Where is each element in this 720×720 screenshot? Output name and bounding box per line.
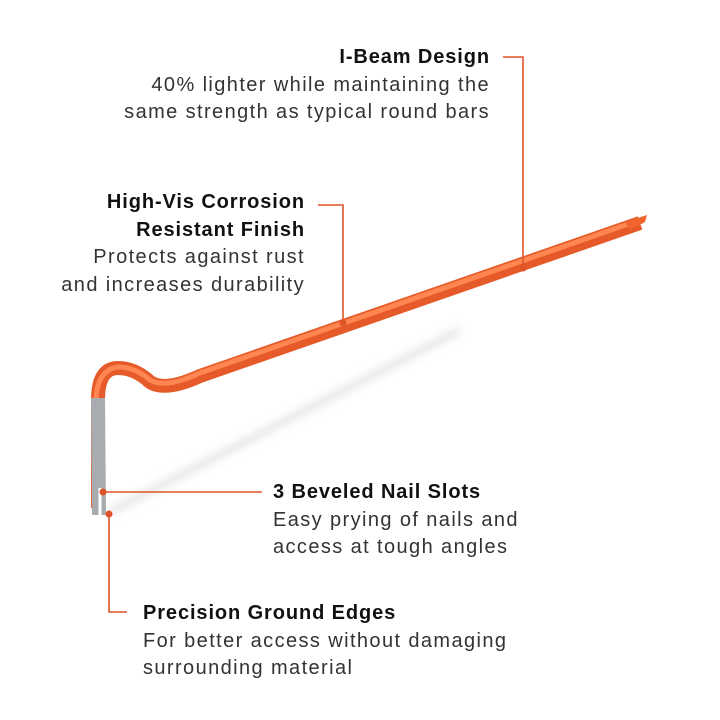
callout: nail slots: Easy prying of nails and [273,508,519,530]
callout: High-Vis finish [61,191,305,296]
callout: nail slots: access at tough angles [273,536,508,558]
callout: precision edges: surrounding material [143,657,353,679]
silver tip [91,398,106,515]
callout: nail slots [273,481,519,558]
callout: precision edges: For better access without damaging [143,630,507,652]
bar body [98,223,640,508]
callout: High-Vis finish: High-Vis Corrosion [107,191,305,213]
callout: High-Vis finish: Protects against rust [93,246,305,268]
callout: High-Vis finish: and increases durability [61,274,305,296]
callout: I-Beam Design: I-Beam Design [339,46,490,68]
callout: I-Beam Design: 40% lighter while maintaining the [151,74,490,96]
leader lines [103,57,523,612]
shadow [110,330,460,512]
callout: I-Beam Design [124,46,490,123]
callout: nail slots: 3 Beveled Nail Slots [273,481,481,503]
callout: precision edges: Precision Ground Edges [143,602,396,624]
callout: High-Vis finish: Resistant Finish [136,218,305,240]
callout: I-Beam Design: same strength as typical round bars [124,101,490,123]
claw tip [625,215,647,230]
callout: precision edges [143,602,507,679]
